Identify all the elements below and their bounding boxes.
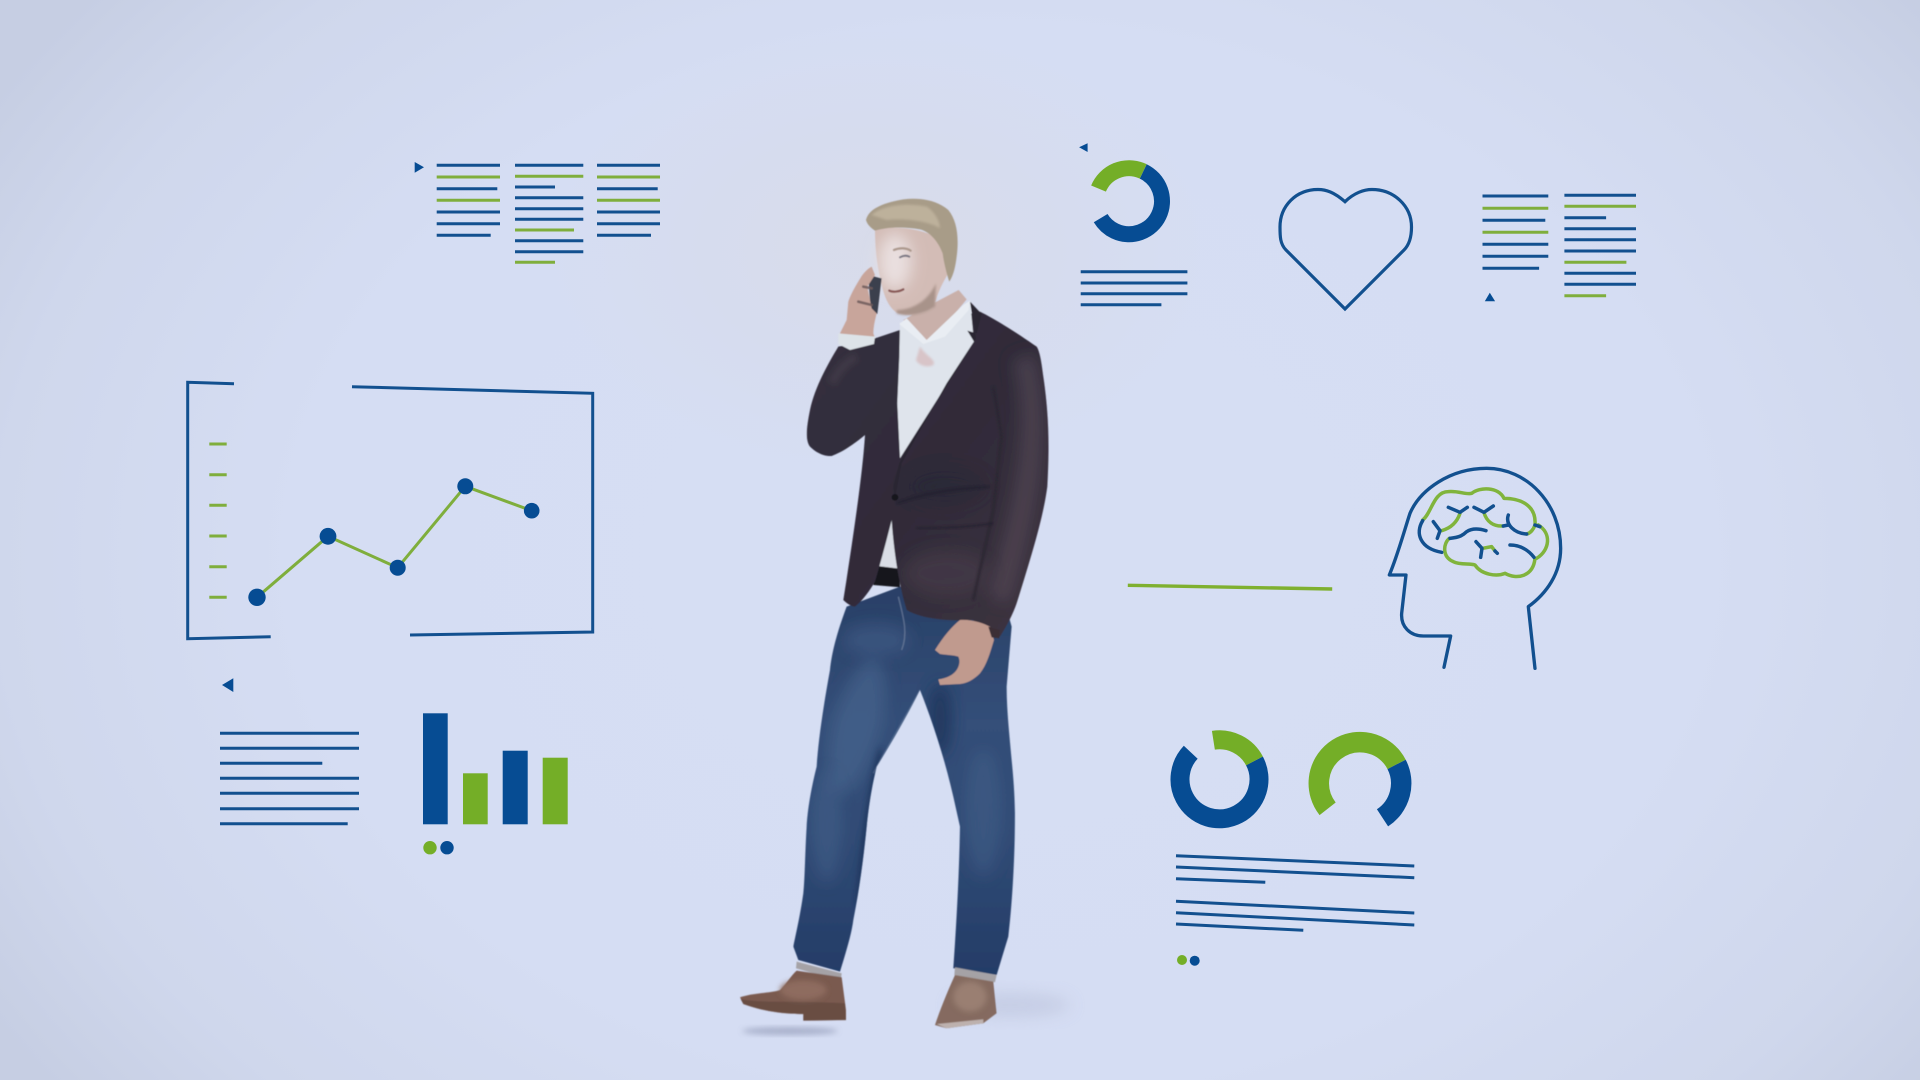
caption lines: [1081, 272, 1187, 305]
data line: [257, 486, 532, 597]
panel: top donut with caption: [1079, 143, 1187, 305]
panel: bottom right donuts and text: [1166, 725, 1418, 966]
data points: [248, 478, 540, 606]
text lines: [220, 733, 359, 824]
face: [875, 227, 950, 315]
neck: [903, 290, 967, 342]
lower body: [740, 580, 1027, 1028]
hand at ear: [840, 267, 877, 343]
column 2: [515, 165, 583, 262]
text block: top right two columns: [1482, 195, 1636, 301]
icon: head with brain: [1389, 468, 1561, 668]
jacket: [806, 311, 1050, 636]
text lines: [1176, 856, 1414, 930]
hair highlight: [872, 205, 940, 228]
shirt cuff: [838, 333, 875, 350]
jacket button: [892, 494, 898, 501]
donut chart: left: [1166, 726, 1273, 833]
donut chart: right: [1302, 725, 1418, 841]
right hand: [935, 620, 1000, 685]
bar chart: [423, 713, 568, 824]
axis ticks: [209, 444, 227, 597]
jeans cuffs: [796, 962, 997, 982]
text block: top left three columns: [415, 162, 660, 262]
upper body: [800, 199, 1057, 643]
icon: right-pointing triangle: [415, 162, 424, 173]
brain: green lobes: [1423, 489, 1548, 576]
icon: left-pointing triangle: [222, 678, 233, 692]
chart frame: [188, 382, 593, 639]
left shoe: [740, 971, 846, 1021]
jeans: [792, 586, 1016, 976]
donut chart: blue and green: [1085, 157, 1173, 245]
legend dots: [423, 841, 454, 854]
photo figure: man walking on the phone: [740, 199, 1070, 1035]
column 1: [437, 165, 500, 235]
floor shadows: [742, 993, 1070, 1035]
panel: bottom left text and bars: [220, 678, 568, 854]
icon: heart outline: [1280, 190, 1412, 309]
line chart panel: [188, 382, 593, 639]
right shoe: [935, 975, 997, 1028]
watch: [988, 627, 1000, 638]
green divider line: [1128, 585, 1332, 589]
facial features: [889, 248, 911, 292]
icon: left-pointing triangle: [1079, 143, 1088, 152]
shirt: [897, 301, 974, 458]
collar: [899, 301, 970, 344]
finger shadows: [858, 287, 872, 305]
column 2: [1564, 195, 1636, 296]
jacket lapel: [893, 302, 982, 498]
face highlight: [878, 233, 912, 290]
icon: up-pointing triangle: [1485, 293, 1495, 301]
column 3: [597, 165, 660, 235]
brain: blue folds: [1419, 506, 1540, 557]
legend dots: [1177, 955, 1200, 966]
column 1: [1482, 196, 1548, 268]
shirt hem and belt: [873, 517, 900, 587]
phone: [868, 275, 882, 314]
beard shadow: [897, 283, 936, 315]
head outline: [1389, 468, 1561, 668]
hair: [866, 199, 958, 282]
